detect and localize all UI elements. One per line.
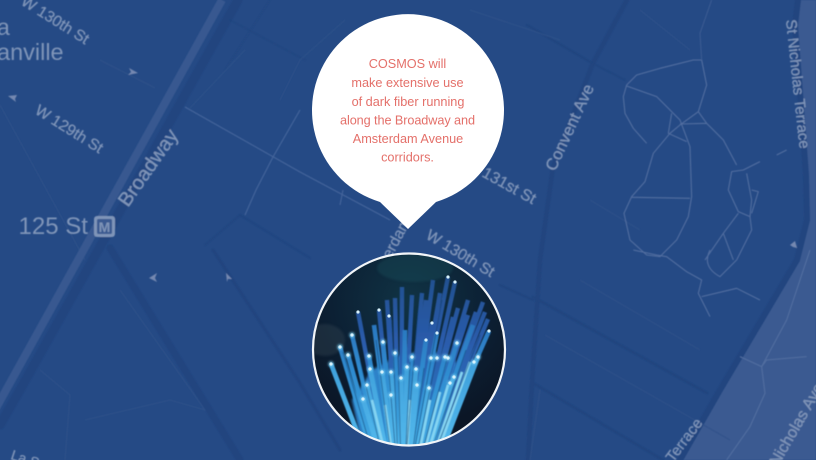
map labels: W 130th St	[423, 227, 498, 281]
callout text	[340, 57, 475, 164]
park area	[680, 0, 816, 460]
solid fiber mass	[350, 350, 457, 442]
callout text: make extensive use	[351, 76, 464, 90]
fiber optic photo circle	[305, 254, 505, 460]
metro M badge	[94, 216, 115, 237]
metro M badge: M	[99, 219, 110, 235]
Broadway band	[0, 0, 222, 410]
light streets	[185, 107, 390, 220]
callout text: of dark fiber running	[352, 95, 464, 109]
map labels: Broadway	[114, 125, 183, 211]
park paths	[623, 0, 787, 260]
map labels: Convent Ave	[542, 82, 598, 174]
map labels: Amsterdam Ave	[363, 189, 429, 293]
fiber tips glow	[331, 335, 478, 399]
map labels: 125 St	[18, 213, 88, 240]
map labels: W 129th St	[32, 102, 107, 157]
callout text: Amsterdam Avenue	[353, 132, 463, 146]
callout text: along the Broadway and	[340, 114, 475, 128]
map labels: 131st St	[479, 165, 539, 208]
speech bubble callout	[312, 14, 504, 229]
callout text: COSMOS will	[369, 57, 446, 71]
fiber tips	[331, 277, 489, 399]
photo backdrop glow	[314, 324, 344, 356]
fibers back layer	[331, 277, 489, 460]
map labels: St Nicholas Terrace	[782, 19, 812, 149]
map arrows	[8, 68, 797, 282]
callout text: corridors.	[381, 150, 434, 164]
